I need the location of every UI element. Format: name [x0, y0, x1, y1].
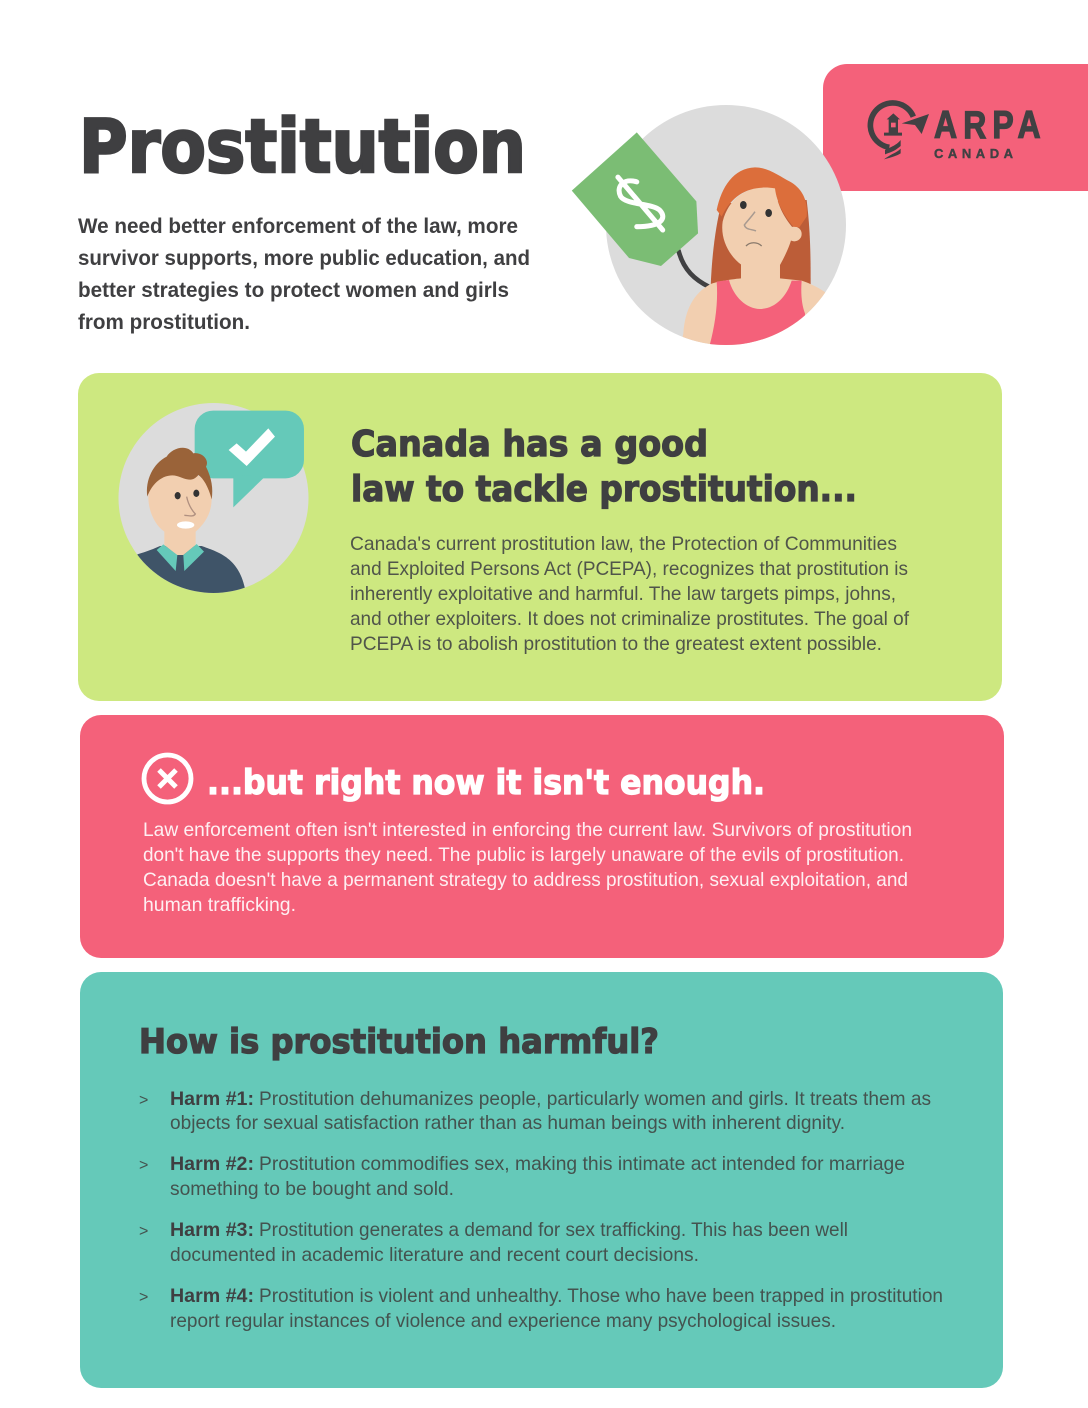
- logo wordmark: ARPA: [934, 103, 1041, 147]
- body text: and Exploited Persons Act (PCEPA), recognizes that prostitution is: [350, 558, 908, 580]
- harm 1: objects for sexual satisfaction rather than as human beings with inherent dignity.: [170, 1112, 845, 1134]
- harm 2: something to be bought and sold.: [170, 1178, 454, 1200]
- title: Prostitution: [79, 104, 526, 190]
- body text: human trafficking.: [143, 894, 296, 916]
- harm 3: >: [139, 1223, 148, 1240]
- harm 3: [139, 1219, 848, 1266]
- harm 1: Harm #1:: [170, 1088, 254, 1110]
- body text: [143, 819, 912, 916]
- body text: and other exploiters. It does not criminalize prostitutes. The goal of: [350, 608, 910, 630]
- harm 2: Prostitution commodifies sex, making this intimate act intended for marriage: [259, 1153, 905, 1175]
- harm 1: [139, 1088, 931, 1134]
- harm 2: Harm #2:: [170, 1153, 254, 1175]
- icon: green price tag with dollar sign: [572, 132, 698, 266]
- harm 3: Prostitution generates a demand for sex trafficking. This has been well: [259, 1219, 848, 1241]
- panel: how is prostitution harmful: [80, 972, 1003, 1388]
- body text: don't have the supports they need. The public is largely unaware of the evils of prostitution.: [143, 844, 904, 866]
- intro text: We need better enforcement of the law, more: [78, 215, 518, 238]
- harm 3: Harm #3:: [170, 1219, 254, 1241]
- heading: [351, 424, 857, 510]
- harm 4: [139, 1285, 943, 1332]
- harm 4: Harm #4:: [170, 1285, 254, 1307]
- heading: law to tackle prostitution...: [351, 469, 857, 510]
- heading: ...but right now it isn't enough.: [207, 763, 765, 803]
- body text: Canada doesn't have a permanent strategy to address prostitution, sexual exploitation, and: [143, 869, 908, 891]
- intro text: survivor supports, more public education, and: [78, 247, 530, 270]
- harm 3: documented in academic literature and recent court decisions.: [170, 1244, 699, 1266]
- harm 4: report regular instances of violence and experience many psychological issues.: [170, 1310, 836, 1332]
- body text: Canada's current prostitution law, the Protection of Communities: [350, 533, 897, 555]
- body text: Law enforcement often isn't interested in enforcing the current law. Survivors of prostitution: [143, 819, 912, 841]
- body text: [350, 533, 910, 655]
- panel: but right now it isn't enough: [80, 715, 1004, 958]
- harm 2: >: [139, 1157, 148, 1174]
- intro text: better strategies to protect women and girls: [78, 279, 509, 302]
- icon: ARPA lighthouse ring and arrow: [870, 103, 929, 159]
- icon: X in circle: [144, 755, 191, 802]
- illustration: woman with price tag: [572, 105, 846, 350]
- logo wordmark: CANADA: [934, 146, 1014, 161]
- heading: How is prostitution harmful?: [139, 1022, 659, 1062]
- panel: Canada has a good law: [78, 373, 1002, 701]
- illustration: man with speech bubble: [118, 403, 308, 600]
- body text: PCEPA is to abolish prostitution to the greatest extent possible.: [350, 633, 882, 655]
- harm 2: [139, 1153, 905, 1200]
- logo tab: ARPA Canada: [823, 64, 1088, 191]
- harm 4: Prostitution is violent and unhealthy. Those who have been trapped in prostitution: [259, 1285, 943, 1307]
- harm 4: >: [139, 1289, 148, 1306]
- body text: inherently exploitative and harmful. The law targets pimps, johns,: [350, 583, 896, 605]
- harm 1: >: [139, 1092, 148, 1109]
- intro text: [78, 215, 530, 334]
- intro text: from prostitution.: [78, 311, 250, 334]
- icon: speech bubble with check mark: [195, 411, 304, 507]
- harm 1: Prostitution dehumanizes people, particularly women and girls. It treats them as: [259, 1088, 931, 1110]
- heading: Canada has a good: [351, 424, 708, 465]
